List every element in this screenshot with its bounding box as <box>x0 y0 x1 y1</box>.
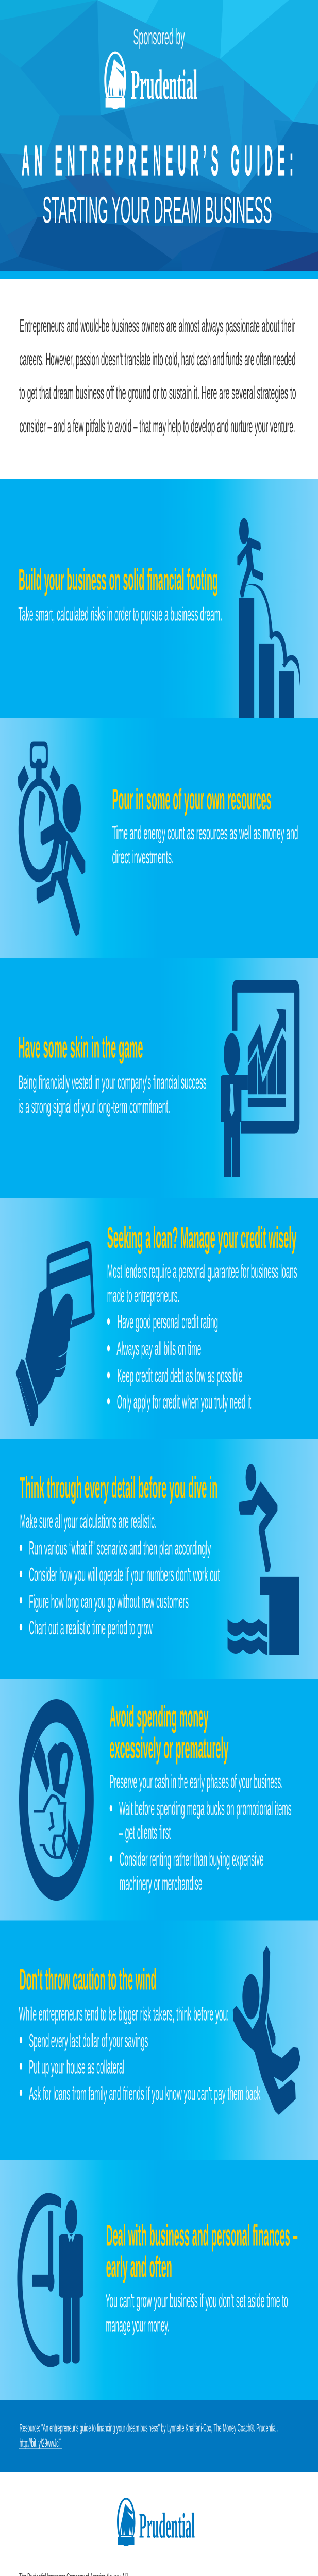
heading: early and often <box>106 2250 172 2284</box>
body text <box>112 822 298 868</box>
panel: avoid spending money <box>0 1679 318 1921</box>
polygon background <box>0 0 318 271</box>
icon: prudential rock logo blue <box>117 2498 136 2546</box>
icon: presenter with growth chart <box>221 980 299 1177</box>
panel: header <box>0 0 318 279</box>
bullet list: Put up your house as collateral <box>29 2057 124 2077</box>
icon: businessman beside clock <box>17 2193 83 2367</box>
body text <box>106 2290 288 2336</box>
bullet list <box>20 2030 260 2104</box>
footer logo <box>117 2498 195 2546</box>
panel: header: Sponsored by <box>133 25 185 49</box>
panel: think through every detail <box>0 1439 318 1679</box>
panel: build your business <box>0 479 318 719</box>
icon: diver on platform above water <box>228 1464 299 1655</box>
infographic canvas: Prudential <box>139 2506 195 2546</box>
bullet list: – get clients first <box>119 1822 171 1843</box>
heading <box>106 2219 298 2284</box>
resource link <box>19 2436 62 2449</box>
body text: direct investments. <box>112 846 174 868</box>
bullet list <box>110 1798 291 1894</box>
panel: don't throw caution <box>0 1921 318 2160</box>
body text <box>107 1261 297 1306</box>
heading <box>109 1700 229 1765</box>
body text: made to entrepreneurs. <box>107 1285 179 1306</box>
icon: hand holding credit card <box>16 1241 95 1426</box>
icon: man running with stopwatch <box>18 742 85 936</box>
accent bar <box>0 271 318 279</box>
panel: resource band: http://bit.ly/29wwJcT <box>20 2436 61 2449</box>
panel: resource band <box>0 2400 318 2472</box>
bullet list <box>107 1311 251 1413</box>
body text <box>18 1072 207 1117</box>
panel: skin in the game <box>0 958 318 1198</box>
panel: seeking a loan <box>0 1198 318 1439</box>
panel: deal with finances <box>0 2160 318 2400</box>
title: AN ENTREPRENEUR’S GUIDE: <box>22 137 293 184</box>
body text: manage your money. <box>106 2314 170 2336</box>
bullet list <box>20 1537 220 1638</box>
panel: pour in resources <box>0 718 318 958</box>
icon: prudential rock logo white <box>104 52 126 109</box>
intro text block <box>19 316 296 436</box>
icon: falling businessman <box>233 1946 300 2115</box>
icon: no money prohibition sign <box>19 1699 94 1901</box>
icon: man leaping down bars <box>237 518 300 719</box>
